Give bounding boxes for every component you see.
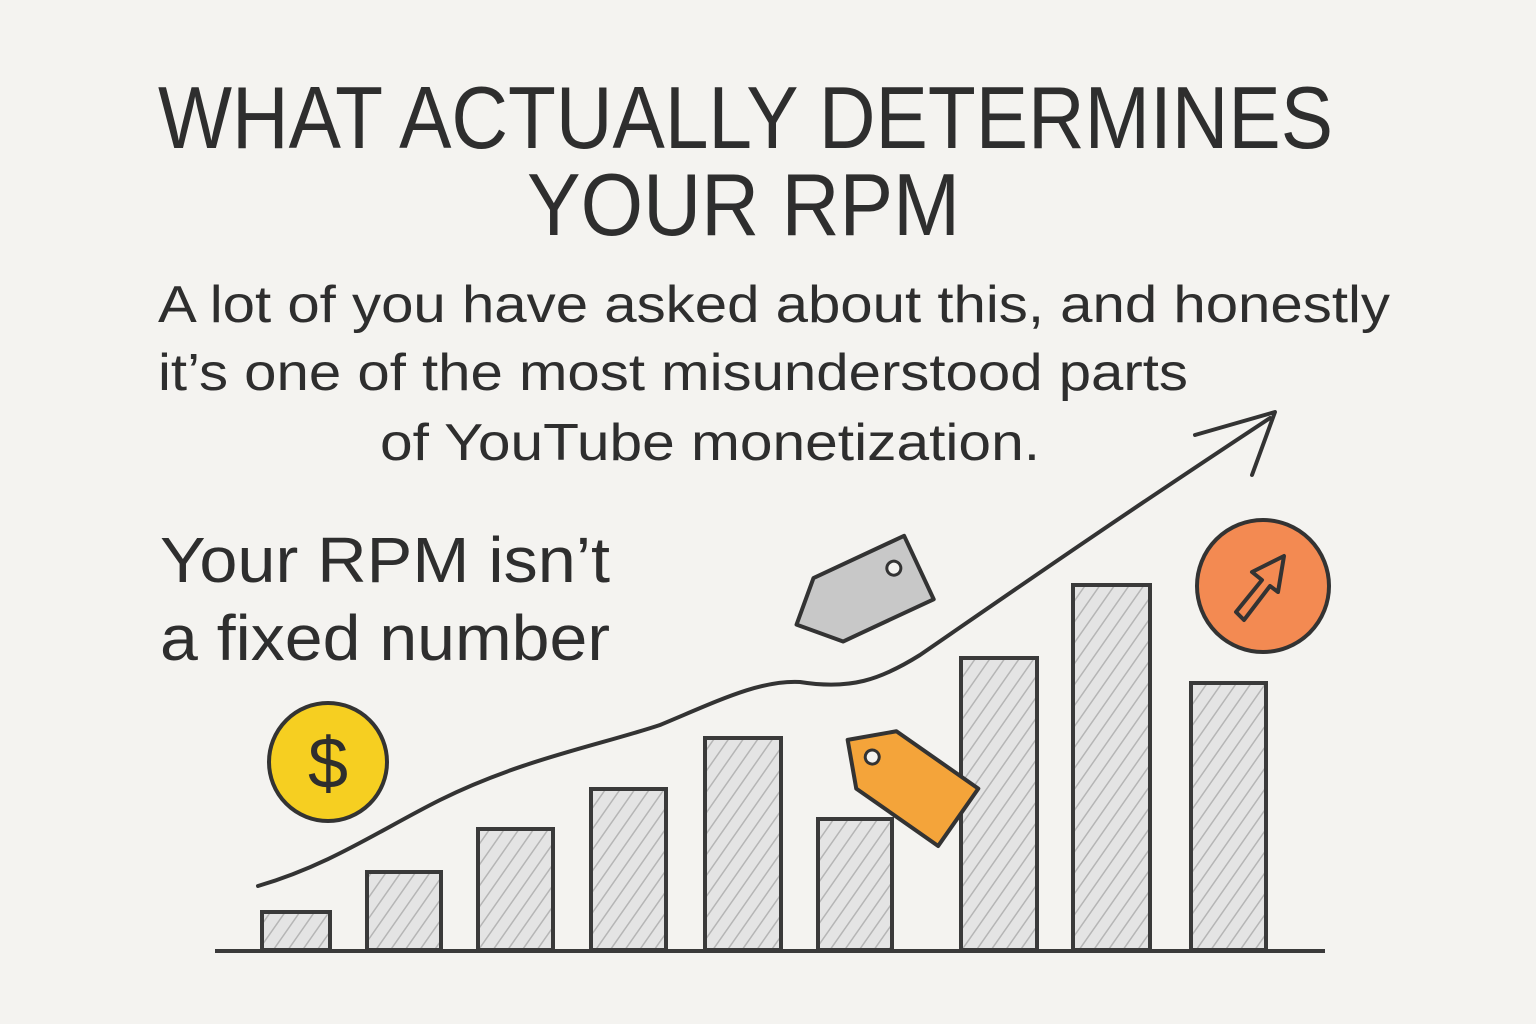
title: YOUR RPM [527, 155, 960, 254]
icon: gray tag [782, 536, 934, 656]
subheading: a fixed number [160, 602, 610, 674]
intro paragraph: it’s one of the most misunderstood parts [158, 344, 1188, 402]
title: WHAT ACTUALLY DETERMINES [158, 68, 1333, 167]
title [158, 68, 1333, 254]
icon: orange tag [828, 711, 978, 846]
icon: orange up-arrow circle [1197, 520, 1329, 652]
icon: dollar coin [269, 703, 387, 821]
intro paragraph: of YouTube monetization. [380, 414, 1040, 472]
icon: dollar coin: $ [308, 724, 348, 804]
arrow: trend line [258, 412, 1275, 886]
subheading: Your RPM isn’t [160, 524, 610, 596]
bar chart [215, 585, 1325, 951]
intro paragraph: A lot of you have asked about this, and honestly [158, 276, 1390, 334]
subheading [160, 524, 610, 674]
intro paragraph [158, 276, 1390, 472]
